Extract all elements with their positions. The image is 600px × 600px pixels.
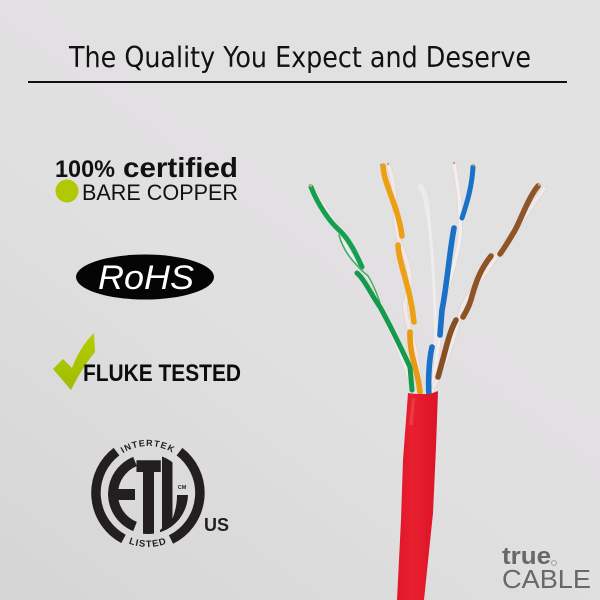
badge: 100% certified bare copper: certified	[123, 152, 238, 183]
wire pair: green	[311, 187, 412, 390]
cable illustration	[310, 163, 544, 396]
logo: trueCABLE: CABLE	[502, 564, 591, 594]
badge: 100% certified bare copper: 100%	[55, 156, 115, 183]
logo: trueCABLE	[502, 543, 591, 594]
cable jacket	[397, 391, 438, 600]
ETL letters: E	[100, 439, 142, 552]
wire pair: orange	[383, 164, 420, 392]
wire: white solo strand	[420, 186, 436, 392]
wire pair: blue	[429, 164, 473, 396]
badge: ETL listed logo: INTERTEK	[120, 440, 175, 453]
badge: ETL listed logo: US	[204, 515, 229, 535]
ETL letters: L	[158, 437, 196, 553]
badge: fluke tested	[53, 333, 241, 390]
badge: ETL listed logo: CM	[178, 485, 187, 491]
ETL letters	[108, 456, 188, 534]
badge: 100% certified bare copper	[55, 152, 238, 205]
badge: 100% certified bare copper: BARE COPPER	[82, 180, 238, 205]
icon: green check mark	[53, 333, 95, 390]
jacket highlight	[409, 398, 415, 425]
icon: green dot	[56, 180, 78, 202]
ETL letters: T	[136, 438, 161, 557]
badge: RoHS	[76, 254, 214, 300]
wire pair: brown	[434, 186, 544, 386]
title: The Quality You Expect and Deserve	[68, 41, 531, 74]
badge: fluke tested: FLUKE TESTED	[83, 360, 241, 387]
badge: ETL listed logo	[91, 440, 229, 548]
wire tips: copper	[310, 163, 539, 186]
badge: RoHS: RoHS	[98, 259, 194, 297]
logo: trueCABLE: true	[502, 543, 551, 570]
outer ring	[96, 452, 200, 540]
badge: ETL listed logo: LISTED	[129, 538, 166, 548]
